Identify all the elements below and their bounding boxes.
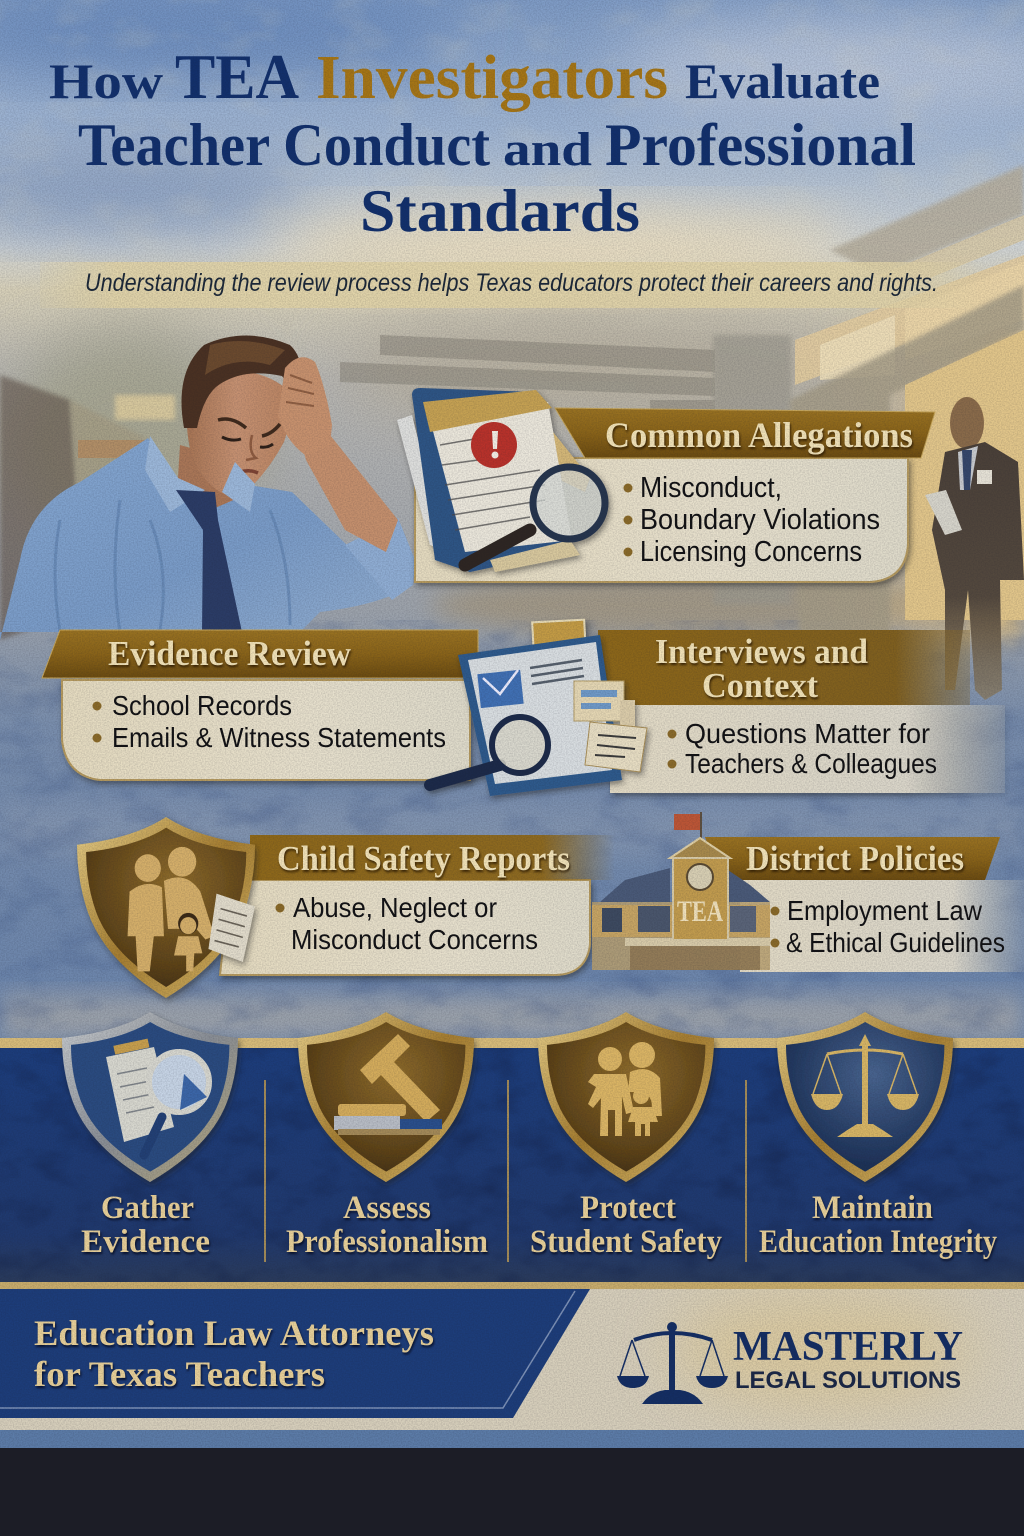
shield: protect student safety: [538, 1012, 714, 1182]
allegations list: Boundary Violations: [640, 504, 880, 536]
child safety list: Misconduct Concerns: [291, 924, 538, 955]
footer navy tagline panel: Education Law Attorneys: [34, 1313, 434, 1353]
panel: common allegations: [415, 408, 935, 582]
allegations list: Licensing Concerns: [640, 536, 862, 568]
icon: evidence folder with envelope and magnifier: [430, 620, 647, 796]
logo scales icon: [617, 1322, 728, 1404]
interviews heading: Context: [702, 666, 818, 705]
shield: assess professionalism: [298, 1012, 474, 1182]
evidence list: Emails & Witness Statements: [112, 722, 446, 753]
shirt: [0, 438, 415, 640]
shield captions: Assess: [343, 1190, 431, 1226]
footer: [0, 1282, 1024, 1448]
district heading: District Policies: [746, 839, 964, 878]
child safety card body: [220, 880, 590, 975]
shield: maintain education integrity: [777, 1012, 953, 1182]
interviews list: Questions Matter for: [685, 718, 930, 749]
title: Standards: [360, 178, 640, 244]
hair: [182, 336, 302, 428]
child safety list: [276, 892, 538, 955]
shield captions: Protect: [580, 1190, 676, 1226]
allegations list: [624, 472, 880, 568]
footer navy tagline panel: for Texas Teachers: [34, 1354, 325, 1394]
district list: Employment Law: [787, 895, 983, 926]
collar: [145, 436, 255, 512]
panel: district policies: [705, 837, 1024, 972]
evidence card body: [62, 680, 470, 780]
interviews card body: [610, 705, 1005, 793]
evidence list: [92, 690, 446, 753]
shield captions: Evidence: [81, 1224, 210, 1260]
district list: [770, 895, 1005, 958]
tie: [176, 490, 242, 632]
title: [49, 41, 916, 244]
shield captions: Gather: [101, 1190, 194, 1226]
title: Teacher Conduct: [78, 112, 490, 178]
child safety list: Abuse, Neglect or: [293, 892, 497, 923]
panel: evidence review: [42, 630, 478, 780]
district card body: [740, 880, 1024, 972]
allegations card body: [415, 458, 908, 582]
interviews heading: [655, 632, 869, 705]
panel: child safety reports: [220, 835, 615, 975]
head: [187, 371, 297, 496]
background figure: investigator with papers: [925, 397, 1024, 700]
logo: Masterly Legal Solutions: MASTERLY: [733, 1324, 963, 1370]
district ribbon: [705, 837, 1000, 880]
panel: navy mission band: [0, 1038, 1024, 1282]
title: Professional: [605, 112, 916, 178]
icon: case folder with alert and magnifier: [397, 388, 605, 572]
evidence ribbon: [42, 630, 478, 678]
logo: Masterly Legal Solutions: LEGAL SOLUTIONS: [735, 1367, 961, 1394]
hand: [278, 357, 332, 455]
shield captions: Professionalism: [286, 1224, 488, 1260]
bottom dark strip: [0, 1448, 1024, 1536]
interviews ribbon: [598, 630, 970, 705]
interviews heading: Interviews and: [655, 632, 869, 671]
child safety ribbon: [250, 835, 615, 880]
interviews list: Teachers & Colleagues: [685, 748, 937, 779]
child safety heading: Child Safety Reports: [277, 839, 570, 878]
title: and: [503, 123, 592, 176]
neck: [178, 445, 252, 508]
illustration: stressed teacher: [0, 336, 415, 640]
title: TEA: [175, 41, 299, 112]
evidence list: School Records: [112, 690, 292, 721]
evidence heading: Evidence Review: [108, 634, 352, 673]
forearm: [295, 420, 398, 552]
shield captions: Student Safety: [530, 1224, 722, 1260]
interviews list: [668, 718, 937, 779]
subtitle band: [40, 262, 985, 308]
logo: Masterly Legal Solutions: [617, 1322, 963, 1404]
footer navy tagline panel: [0, 1289, 590, 1418]
title: How: [49, 53, 163, 109]
allegations ribbon: [555, 408, 935, 458]
title: Investigators: [316, 44, 668, 112]
shield captions: [81, 1190, 997, 1260]
icon: family shield: [77, 817, 255, 998]
panel: interviews and context: [598, 630, 1005, 793]
shield: gather evidence: [62, 1012, 238, 1182]
icon: TEA school building: [592, 812, 770, 970]
allegations list: Misconduct,: [640, 472, 782, 504]
background: school hallway: [0, 165, 1024, 640]
title: Evaluate: [685, 53, 880, 109]
allegations heading: Common Allegations: [605, 415, 913, 455]
shield captions: Maintain: [812, 1190, 933, 1226]
icon: TEA school building: TEA: [677, 895, 723, 928]
